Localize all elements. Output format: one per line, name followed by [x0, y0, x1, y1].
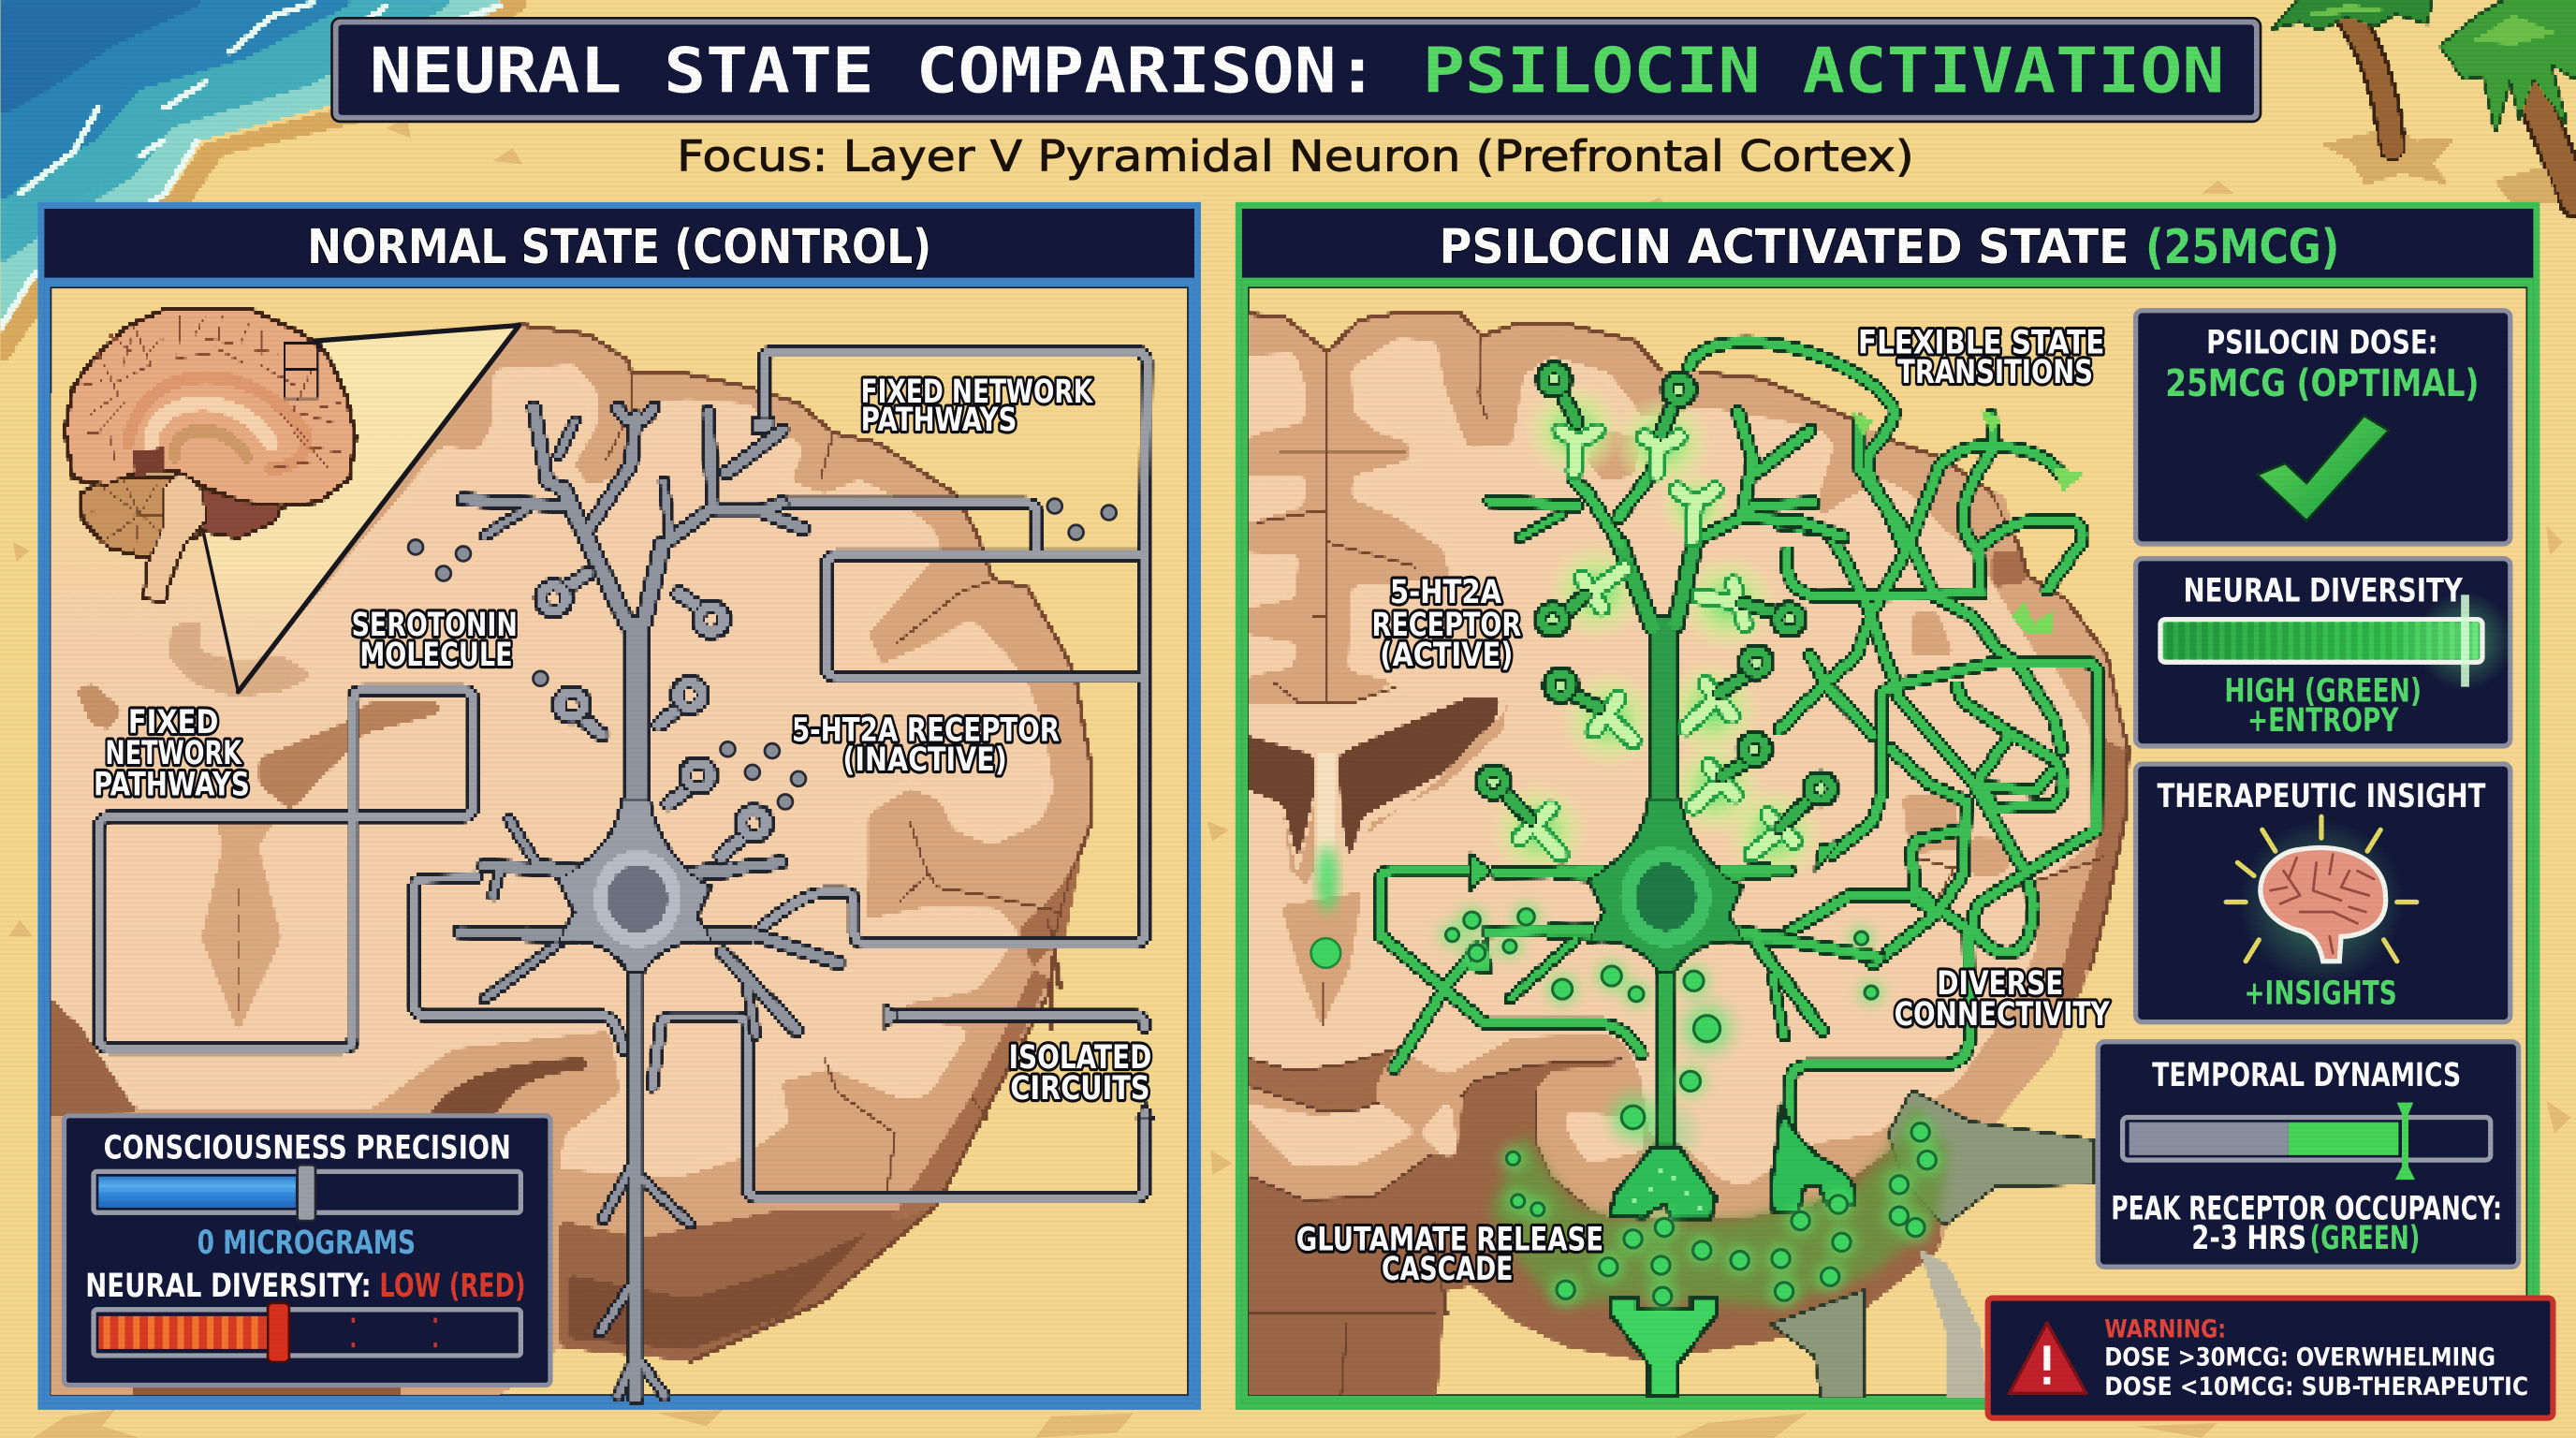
- label: fixed network pathways top: [861, 373, 1093, 439]
- widget: temporal dynamics: TEMPORAL DYNAMICS: [2152, 1056, 2461, 1094]
- glow: glutamate cascade zone: [1311, 846, 1949, 1306]
- callout: warning: DOSE <10MCG: SUB-THERAPEUTIC: [2104, 1373, 2528, 1401]
- subtitle: Focus: Layer V Pyramidal Neuron (Prefrontal Cortex): [677, 132, 1914, 182]
- slider: diversity: [94, 1303, 520, 1362]
- icon: glowing brain: [2226, 816, 2417, 984]
- label: flexible state transitions: TRANSITIONS: [1897, 353, 2093, 391]
- label: glutamate release cascade: CASCADE: [1382, 1250, 1513, 1288]
- widget: temporal dynamics: 2-3 HRS: [2191, 1219, 2306, 1257]
- label: fixed network pathways left: NETWORK: [105, 734, 242, 772]
- icon: warning triangle: [2009, 1323, 2086, 1393]
- network pathways: flexible tangled connections: [1380, 342, 2098, 1142]
- label: diverse connectivity: [1895, 964, 2110, 1034]
- panel heading: normal state: NORMAL STATE (CONTROL): [307, 220, 931, 275]
- widget: neural diversity: +ENTROPY: [2247, 701, 2399, 740]
- bar: high diversity: [2160, 592, 2513, 690]
- widget: consciousness precision: 0 MICROGRAMS: [198, 1224, 416, 1262]
- inset: zoom triangle: [204, 326, 520, 692]
- cortex cross-section: [1236, 314, 2128, 1405]
- neuron: green activated: [1488, 413, 1880, 1153]
- label: glutamate release cascade: [1296, 1221, 1603, 1288]
- widget: psilocin dose: 25MCG (OPTIMAL): [2165, 361, 2479, 405]
- panel heading: activated state: (25MCG): [2145, 220, 2339, 275]
- label: 5-HT2A receptor inactive: (INACTIVE): [842, 741, 1007, 779]
- illustration: palm trees: [2274, 0, 2576, 204]
- title banner: NEURAL STATE COMPARISON:: [370, 34, 1379, 107]
- title banner: PSILOCIN ACTIVATION: [1423, 34, 2224, 107]
- icons: serotonin molecules: [408, 499, 1117, 809]
- label: 5-HT2A receptor active: RECEPTOR: [1372, 606, 1521, 644]
- label: flexible state transitions: FLEXIBLE STATE: [1858, 323, 2104, 361]
- timeline bar: [2123, 1103, 2491, 1180]
- label: diverse connectivity: DIVERSE: [1937, 964, 2063, 1003]
- panel heading: normal state: [48, 212, 1191, 276]
- widget: temporal dynamics: [2098, 1042, 2519, 1267]
- widget: psilocin dose: [2136, 311, 2510, 544]
- label: 5-HT2A receptor inactive: 5-HT2A RECEPTOR: [792, 712, 1060, 750]
- glutamate vesicles: [1445, 909, 1936, 1305]
- label: serotonin molecule: [352, 606, 518, 674]
- widget: consciousness precision: NEURAL DIVERSITY:: [85, 1267, 372, 1305]
- label: 5-HT2A receptor inactive: [792, 712, 1060, 779]
- widget: psilocin dose: PSILOCIN DOSE:: [2206, 323, 2438, 361]
- label: serotonin molecule: MOLECULE: [359, 636, 513, 674]
- label: fixed network pathways left: PATHWAYS: [94, 765, 250, 803]
- label: 5-HT2A receptor active: [1372, 573, 1521, 674]
- label: diverse connectivity: CONNECTIVITY: [1895, 995, 2110, 1034]
- panel frame: activated: [1238, 205, 2537, 1406]
- panel frame: normal: [41, 205, 1197, 1406]
- blood vessels: [1773, 1091, 2093, 1397]
- label: flexible state transitions: [1858, 323, 2104, 391]
- panel heading: activated state: PSILOCIN ACTIVATED STATE: [1439, 220, 2130, 275]
- network pathways: fixed circuits: [98, 352, 1151, 1197]
- label: serotonin molecule: SEROTONIN: [352, 606, 518, 644]
- widget: neural diversity: NEURAL DIVERSITY: [2184, 571, 2463, 609]
- label: fixed network pathways top: PATHWAYS: [861, 401, 1017, 439]
- label: 5-HT2A receptor active: 5-HT2A: [1390, 573, 1501, 611]
- label: isolated circuits: [1009, 1038, 1151, 1108]
- widget: neural diversity: [2136, 559, 2513, 746]
- synaptic terminals: [1612, 1104, 1854, 1397]
- slider: precision: [94, 1165, 520, 1221]
- panel: psilocin activated state: [1236, 205, 2537, 1406]
- glows: activated receptor halos: [1490, 381, 1823, 1173]
- label: fixed network pathways top: FIXED NETWORK: [861, 373, 1093, 411]
- icons: inactive receptors: [535, 574, 772, 856]
- widget: consciousness precision: LOW (RED): [379, 1267, 526, 1305]
- widget: therapeutic insight: [2136, 764, 2510, 1022]
- label: fixed network pathways left: [94, 703, 250, 803]
- callout: warning: WARNING:: [2104, 1316, 2226, 1344]
- panel heading: activated state: [1245, 212, 2530, 276]
- callout: warning: DOSE >30MCG: OVERWHELMING: [2104, 1343, 2496, 1372]
- cortex cross-section: [46, 326, 1090, 1400]
- icon: check mark: [2258, 416, 2389, 521]
- widget: therapeutic insight: THERAPEUTIC INSIGHT: [2157, 777, 2486, 815]
- label: isolated circuits: CIRCUITS: [1010, 1069, 1150, 1108]
- label: glutamate release cascade: GLUTAMATE RELEASE: [1296, 1221, 1603, 1259]
- panel body: activated: [1236, 278, 2533, 1405]
- neuron: grey layer V pyramidal: [460, 407, 838, 1397]
- widget: therapeutic insight: +INSIGHTS: [2244, 974, 2397, 1012]
- label: fixed network pathways left: FIXED: [128, 703, 218, 741]
- widget: neural diversity: HIGH (GREEN): [2224, 671, 2422, 710]
- widget: consciousness precision: [64, 1116, 550, 1386]
- callout: warning: [1988, 1299, 2553, 1418]
- icons: active receptors: [1477, 363, 1837, 855]
- widget: consciousness precision: CONSCIOUSNESS PRECISION: [104, 1128, 511, 1167]
- title banner: [332, 18, 2261, 122]
- illustration: ocean and shoreline: [0, 0, 534, 370]
- label: 5-HT2A receptor active: (ACTIVE): [1380, 636, 1513, 674]
- panel body: normal: [44, 278, 1194, 1403]
- panel: normal state: [41, 205, 1197, 1406]
- label: isolated circuits: ISOLATED: [1009, 1038, 1151, 1077]
- widget: temporal dynamics: (GREEN): [2310, 1219, 2420, 1257]
- inset: sagittal brain: [66, 309, 355, 601]
